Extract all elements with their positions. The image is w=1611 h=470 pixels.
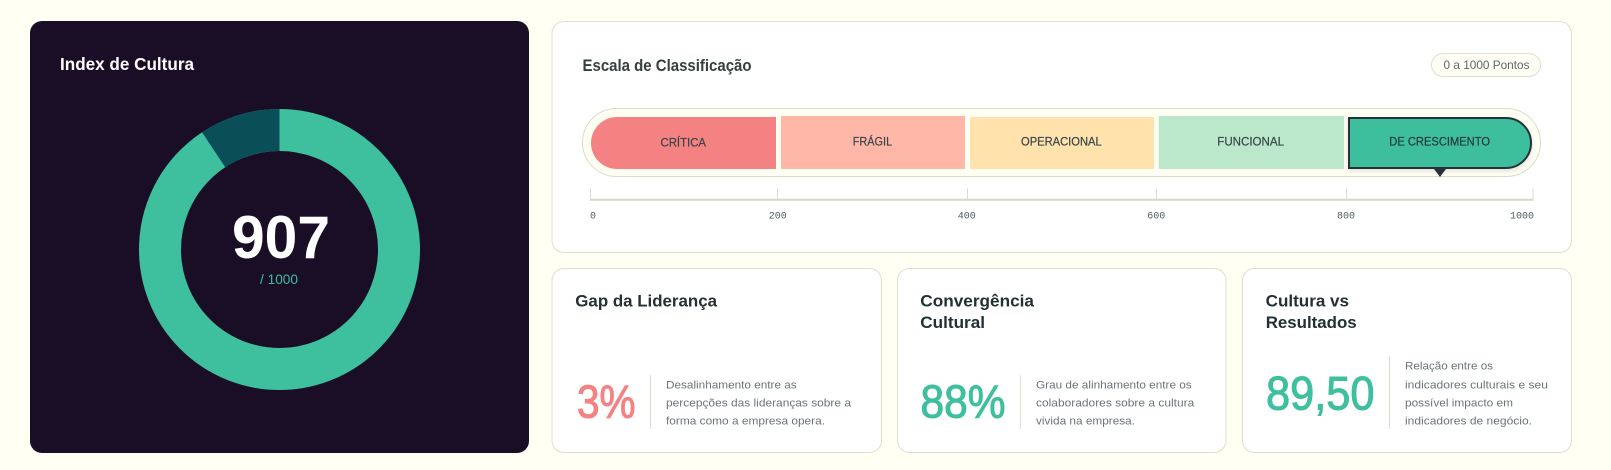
scale axis: 200 [769,212,787,222]
card title: Convergência [920,292,1035,311]
divider and description: forma como a empresa opera. [666,415,825,427]
metric value: 88%: 88% [920,375,1006,427]
segment: operacional: OPERACIONAL [1021,137,1102,149]
segment: critica: CRÍTICA [660,136,706,150]
segment: de crescimento, active: DE CRESCIMENTO [1389,137,1490,149]
card title [920,292,1035,332]
segment: funcional: FUNCIONAL [1217,137,1285,149]
divider and description: possível impacto em [1405,398,1513,410]
card title: Resultados [1266,313,1357,332]
card title: Cultura vs [1266,292,1349,311]
card title: Gap da Liderança [575,292,718,311]
card: cultura vs resultados [1242,268,1572,452]
scale axis: 0 [590,212,596,222]
panel: index de cultura [30,21,529,453]
scale axis [590,188,1534,222]
score maximum: / 1000 [260,271,298,287]
metric value: 89,50: 89,50 [1266,366,1374,419]
card title: Cultural [920,313,985,332]
segment: de crescimento, active [1349,118,1531,168]
card title [1266,292,1357,332]
donut chart: score 907 of 1000 [160,109,399,369]
divider and description: colaboradores sobre a cultura [1036,398,1195,410]
heading: index de cultura: Index de Cultura [60,54,194,74]
divider and description: indicadores culturais e seu [1405,379,1548,391]
divider and description: vivida na empresa. [1036,415,1135,427]
segment: funcional [1159,116,1344,169]
score value: 907 [232,204,330,271]
scale axis: 400 [958,212,976,222]
badge: 0 a 1000 pontos [1432,54,1540,76]
segment: operacional [970,117,1154,169]
divider and description [1020,375,1195,429]
badge: 0 a 1000 pontos: 0 a 1000 Pontos [1444,58,1530,72]
divider and description: Relação entre os [1405,360,1493,372]
scale bar track [582,108,1540,176]
divider and description [1390,356,1548,429]
card: convergencia cultural [898,268,1226,452]
scale axis: 600 [1147,212,1165,222]
segment: critica [591,117,776,169]
divider and description [650,375,852,429]
card: gap da lideranca [552,268,882,452]
divider and description: Grau de alinhamento entre os [1036,379,1192,391]
metric value: 3%: 3% [577,375,636,427]
segment: fragil: FRÁGIL [853,136,893,149]
divider and description: indicadores de negócio. [1405,415,1532,427]
divider and description: percepções das lideranças sobre a [666,398,852,410]
panel: escala de classificacao [552,22,1572,252]
segment: fragil [781,116,965,169]
scale axis: 1000 [1510,212,1534,222]
heading: escala de classificacao: Escala de Classificação [582,57,752,75]
marker: score position [1434,169,1446,177]
scale axis: 800 [1337,212,1355,222]
divider and description: Desalinhamento entre as [666,379,797,391]
